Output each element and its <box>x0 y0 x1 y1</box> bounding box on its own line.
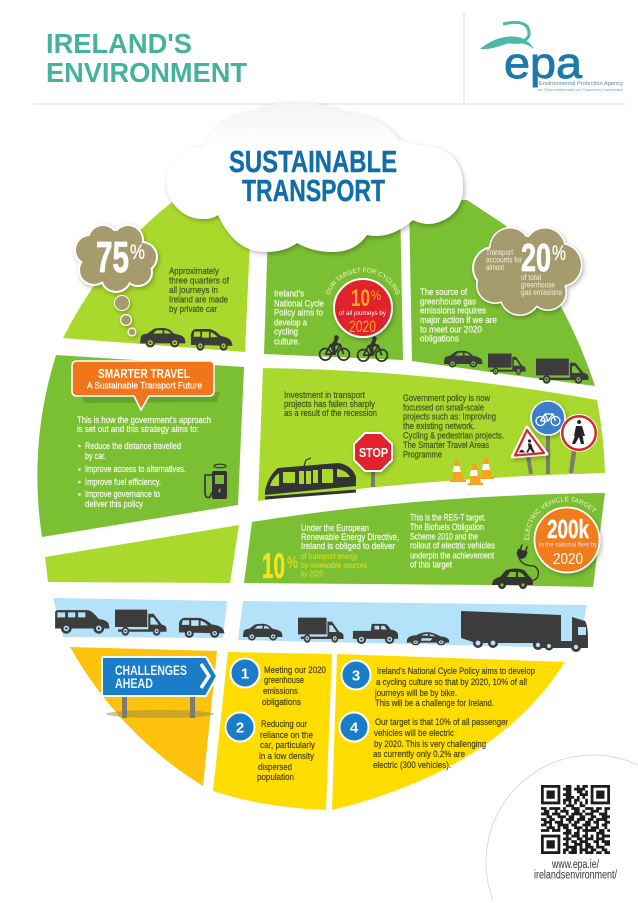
text: government policy: The Smarter Travel Areas <box>403 440 489 451</box>
text: RES-T target: of this target <box>410 560 452 571</box>
icon: thought cloud 75%: % <box>130 241 145 264</box>
icon: 20 percent cloud: accounts for <box>486 256 522 264</box>
band: vehicles right <box>238 601 588 652</box>
panel: 75 percent private car <box>63 200 250 352</box>
badge: 200k electric vehicle target: 2020 <box>553 551 583 568</box>
icon: fuel pump <box>205 464 227 499</box>
text: strategy aims: Reduce the distance travelled <box>85 441 181 452</box>
icon: tram <box>265 458 356 498</box>
text: website address: www.epa.ie/ <box>551 859 600 871</box>
text: government policy: Government policy is now <box>403 393 490 404</box>
text: three quarters by private car: all journeys in <box>169 285 218 296</box>
text: transport energy share <box>301 551 367 578</box>
item: challenge 2: in a low density <box>259 751 314 762</box>
item: challenge 2: car, particularly <box>260 740 315 751</box>
title: sustainable transport: TRANSPORT <box>242 173 385 208</box>
sign: challenges ahead <box>102 657 217 718</box>
text: transport energy share: by 2020 <box>301 568 323 578</box>
header rule and divider <box>33 13 625 104</box>
text: greenhouse gas emissions action <box>420 287 497 345</box>
panel: smarter travel <box>37 355 244 537</box>
icon: stop sign: STOP <box>359 446 388 460</box>
text: national cycle policy: Ireland's <box>274 289 304 300</box>
item: challenge 2: 2 <box>236 720 244 736</box>
item: challenge 4: Our target is that 10% of all passenger <box>375 717 508 728</box>
item: challenge 4: by 2020. This is very challenging <box>374 739 486 750</box>
badge: 10 percent cycling target: 2020 <box>349 317 376 336</box>
icon: van, truck, MPV <box>55 610 225 638</box>
icon: 20 percent cloud: % <box>552 242 566 265</box>
item: challenge 3: a cycling culture so that by 2020, 10% of all <box>376 677 527 688</box>
panel: challenges ahead <box>70 647 217 786</box>
text: greenhouse gas emissions action: greenhouse gas <box>420 296 476 307</box>
badge: 10 percent cycling target: % <box>371 287 381 303</box>
text: RES-T target: rollout of electric vehicles <box>410 541 495 552</box>
text: national cycle policy: Policy aims to <box>274 308 323 319</box>
panel: renewable energy directive <box>244 493 605 589</box>
icon: 20 percent cloud: gas emissions <box>521 288 562 297</box>
text: government policy: the existing network. <box>403 421 475 432</box>
item: challenge 1: emissions <box>263 686 298 697</box>
item: challenge 1: Meeting our 2020 <box>264 665 326 676</box>
sign: challenges ahead: CHALLENGES <box>115 663 187 678</box>
text: transport energy share: by renewable sources <box>301 560 367 570</box>
badge: 10 percent cycling target: of all journeys by <box>339 310 387 317</box>
text: RES-T target: This is the RES-T target. <box>410 513 486 524</box>
panel: challenges 1 and 2 <box>213 652 332 810</box>
text: strategy aims: This is how the government's approach <box>77 415 211 426</box>
text: greenhouse gas emissions action: to meet our 2020 <box>420 325 482 336</box>
item: challenge 3: journeys will be by bike. <box>374 688 457 699</box>
text: RES-T target: Scheme 2010 and the <box>410 531 478 542</box>
text: European directive <box>301 523 399 552</box>
QR circle outline <box>486 755 638 900</box>
icon: car, truck, pickup, sports car <box>243 618 449 645</box>
text: three quarters by private car <box>169 266 229 315</box>
item: challenge 2: Reducing our <box>261 719 307 730</box>
icon: road signs <box>512 401 598 474</box>
item: challenge 3: This will be a challenge for Ireland. <box>375 698 494 709</box>
text: strategy aims: is set out and this strategy aims to: <box>77 424 199 435</box>
panel: source of greenhouse gas <box>409 200 595 386</box>
item: challenge 2: reliance on the <box>260 730 313 741</box>
icon: 20 percent cloud: of total <box>521 273 541 282</box>
text: strategy aims: Improve governance to <box>85 489 160 500</box>
badge: 10 percent cycling target: 10 <box>351 285 370 312</box>
text: strategy aims: by car. <box>85 451 106 462</box>
icon: 20 percent cloud <box>472 227 582 316</box>
logo: EPA: An Ghníomhaireacht um Chaomhnú Comhshaoil <box>538 87 623 92</box>
text: transport energy share: of transport energy <box>301 551 359 561</box>
item: challenge 4 <box>340 712 508 771</box>
item: challenge 3 <box>342 660 535 709</box>
text: investment fallen: projects has fallen sharply <box>284 399 375 410</box>
band: vehicles left <box>53 598 227 638</box>
icon: 20 percent cloud: almost <box>486 263 505 272</box>
text: strategy aims: Improve access to alternatives. <box>85 464 186 475</box>
stat: 10 percent renewables: % <box>287 553 298 572</box>
text: three quarters by private car: Approximately <box>169 266 219 277</box>
text: investment fallen: as a result of the recession <box>284 408 377 419</box>
text: strategy aims: Improve fuel efficiency. <box>85 477 161 488</box>
text: RES-T target: underpin the achievement <box>410 550 494 561</box>
text: greenhouse gas emissions action: obligations <box>420 334 459 345</box>
icon: two cyclists <box>320 335 387 361</box>
icon: 20 percent cloud: greenhouse <box>521 280 555 290</box>
item: challenge 4: 4 <box>350 720 359 736</box>
badge: 10 percent cycling target: OUR TARGET FOR CYCLING <box>326 268 400 294</box>
item: challenge 4: as currently only 0.2% are <box>373 749 465 760</box>
callout: smarter travel: SMARTER TRAVEL <box>98 366 190 381</box>
item: challenge 3: 3 <box>352 668 360 684</box>
icon: car, van and truck <box>444 351 588 384</box>
badge: 200k electric vehicle target: in the national fleet by <box>539 542 598 548</box>
badge: 200k electric vehicle target: ELECTRIC VEHICLE TARGET <box>524 496 596 540</box>
item: challenge 4: electric (300 vehicles). <box>373 760 451 771</box>
callout: smarter travel <box>72 361 220 410</box>
text: investment fallen <box>284 390 377 419</box>
item: challenge 1: obligations <box>262 697 301 708</box>
stat: 10 percent renewables: 10 <box>262 547 285 586</box>
panel: lower-left empty green <box>45 525 239 583</box>
item: challenge 2: population <box>257 772 294 783</box>
text: European directive: Renewable Energy Directive, <box>301 532 399 543</box>
item: challenge 1 <box>230 658 326 708</box>
text: three quarters by private car: Ireland are made <box>169 295 228 306</box>
text: national cycle policy: National Cycle <box>274 298 324 309</box>
icon: thought cloud 75%: 75 <box>96 233 129 282</box>
text: website address: irelandsenvironment/ <box>534 870 618 882</box>
text: strategy aims <box>77 415 211 510</box>
icon: QR code <box>541 786 610 853</box>
icon: articulated lorry <box>461 611 588 652</box>
text: greenhouse gas emissions action: The source of <box>420 287 467 298</box>
badge: 200k electric vehicle target: 200k <box>547 514 589 544</box>
title: Ireland's Environment: IRELAND'S <box>46 28 192 59</box>
text: government policy: Cycling & pedestrian projects. <box>403 430 504 441</box>
text: greenhouse gas emissions action: emissions requires <box>420 306 486 317</box>
logo: EPA <box>480 22 623 92</box>
text: strategy aims: deliver this policy <box>85 499 143 510</box>
item: challenge 4: vehicles will be electric <box>374 728 454 739</box>
item: challenge 3: Ireland's National Cycle Policy aims to develop <box>377 666 535 677</box>
text: investment fallen: Investment in transport <box>284 390 365 401</box>
text: national cycle policy: cycling <box>274 327 298 338</box>
title: Ireland's Environment: ENVIRONMENT <box>46 57 247 88</box>
text: greenhouse gas emissions action: major action if we are <box>420 315 497 326</box>
text: European directive: Ireland is obliged to deliver <box>301 541 395 552</box>
text: RES-T target <box>410 513 495 571</box>
text: government policy: focussed on small-scale <box>403 402 484 413</box>
icon: 20 percent cloud: 20 <box>521 237 551 280</box>
text: government policy: Programme <box>403 450 442 461</box>
text: European directive: Under the European <box>301 523 369 534</box>
title: Ireland's Environment <box>46 28 247 88</box>
text: government policy: projects such as: Improving <box>403 412 496 423</box>
icon: traffic cones <box>450 458 494 485</box>
badge: 200k electric vehicle target <box>524 496 604 578</box>
text: website address <box>534 859 618 882</box>
item: challenge 1: greenhouse <box>264 675 304 686</box>
item: challenge 2 <box>226 712 315 783</box>
icon: 20 percent cloud: Transport <box>486 248 514 257</box>
title: sustainable transport <box>229 144 397 208</box>
text: national cycle policy: develop a <box>274 317 308 328</box>
logo: EPA: epa <box>504 39 583 88</box>
icon: stop sign <box>354 433 392 487</box>
sign: challenges ahead: AHEAD <box>115 676 153 691</box>
item: challenge 2: dispersed <box>258 762 292 773</box>
item: challenge 1: 1 <box>241 666 249 682</box>
cloud: sustainable transport <box>167 102 463 252</box>
title: sustainable transport: SUSTAINABLE <box>229 144 397 179</box>
panel: challenges 3 and 4 <box>332 654 565 810</box>
text: national cycle policy <box>274 289 324 347</box>
panel: national cycle policy <box>264 229 403 362</box>
text: three quarters by private car: by private car <box>169 304 217 315</box>
text: three quarters by private car: three quarters of <box>169 276 229 286</box>
text: government policy <box>403 393 504 461</box>
icon: two cars <box>140 328 233 351</box>
icon: electric car <box>492 544 538 589</box>
callout: smarter travel: A Sustainable Transport Future <box>87 380 202 392</box>
badge: 10 percent cycling target <box>326 268 400 342</box>
icon: thought cloud 75% <box>74 224 158 336</box>
logo: EPA: Environmental Protection Agency <box>539 81 623 87</box>
text: national cycle policy: culture. <box>274 336 300 347</box>
panel: investment and government policy <box>258 368 605 501</box>
text: RES-T target: The Biofuels Obligation <box>410 522 484 533</box>
